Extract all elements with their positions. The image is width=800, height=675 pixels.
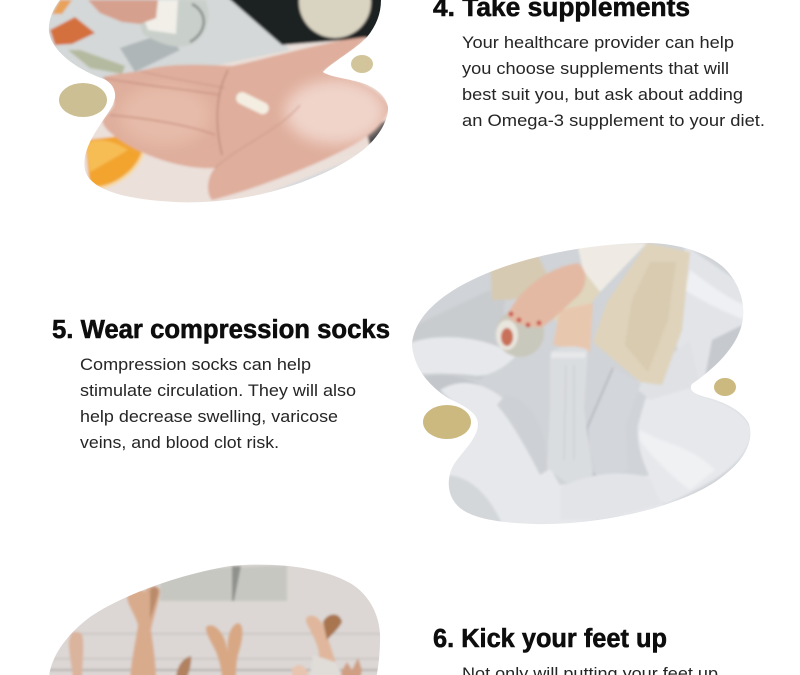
step 4 text (433, 0, 765, 130)
body: step 4: Your healthcare provider can help (462, 34, 734, 52)
decorative dot small (351, 55, 373, 73)
decorative dot large (59, 83, 107, 117)
heading: step 6: 6. Kick your feet up (433, 625, 667, 653)
photo: raised feet against a white wall (40, 560, 390, 675)
body: step 4 (462, 34, 765, 130)
body: step 4: an Omega-3 supplement to your diet. (462, 112, 765, 130)
photo: feet in compression socks on white duvet (405, 238, 760, 533)
body: step 4: best suit you, but ask about adding (462, 86, 743, 104)
body: step 5: help decrease swelling, varicose (80, 408, 338, 426)
body: step 5: veins, and blood clot risk. (80, 434, 279, 452)
body: step 5 (80, 356, 356, 452)
decorative dot large (423, 405, 471, 439)
step 5 text (52, 316, 390, 452)
photo: hand holding a supplement capsule (48, 0, 388, 202)
decorative dot small (714, 378, 736, 396)
heading: step 5: 5. Wear compression socks (52, 316, 390, 344)
body: step 5: Compression socks can help (80, 356, 311, 374)
body: step 5: stimulate circulation. They will also (80, 382, 356, 400)
step 6 text (433, 625, 718, 675)
body: step 4: you choose supplements that will (462, 60, 729, 78)
